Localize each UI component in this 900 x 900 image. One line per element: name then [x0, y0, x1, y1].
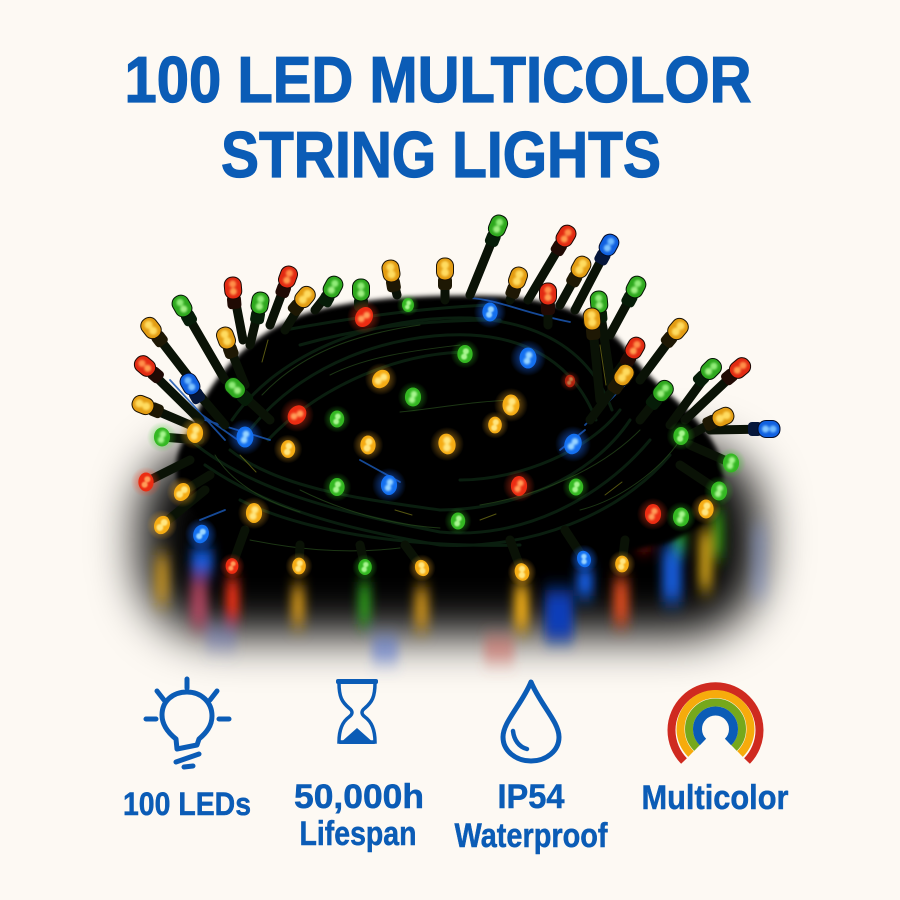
label: 100 LEDs: 100 LEDs	[123, 786, 251, 822]
icon: rainbow	[672, 686, 760, 761]
floor reflections	[154, 510, 768, 662]
label: IP54 Waterproof	[454, 778, 608, 855]
embedded glowing LEDs	[131, 294, 746, 590]
title	[124, 43, 752, 191]
title: 100 LED MULTICOLOR	[124, 43, 752, 116]
label: IP54 Waterproof: IP54	[498, 778, 565, 816]
icon: light bulb	[146, 679, 229, 767]
label: IP54 Waterproof: Waterproof	[454, 817, 608, 855]
outer bulbs on stems	[130, 213, 780, 438]
icon: hourglass	[336, 679, 378, 744]
shadow beneath the lights	[140, 445, 760, 635]
label: 50,000h Lifespan: 50,000h	[294, 778, 424, 816]
icon: water drop	[503, 682, 559, 761]
title: STRING LIGHTS	[221, 118, 661, 191]
label: 50,000h Lifespan	[294, 778, 424, 853]
product photo: string lights	[130, 213, 780, 662]
wire strands	[170, 298, 700, 551]
label: Multicolor: Multicolor	[642, 779, 788, 817]
wire bundle	[176, 296, 723, 557]
label: 50,000h Lifespan: Lifespan	[300, 815, 416, 853]
bulb stems	[143, 226, 769, 572]
